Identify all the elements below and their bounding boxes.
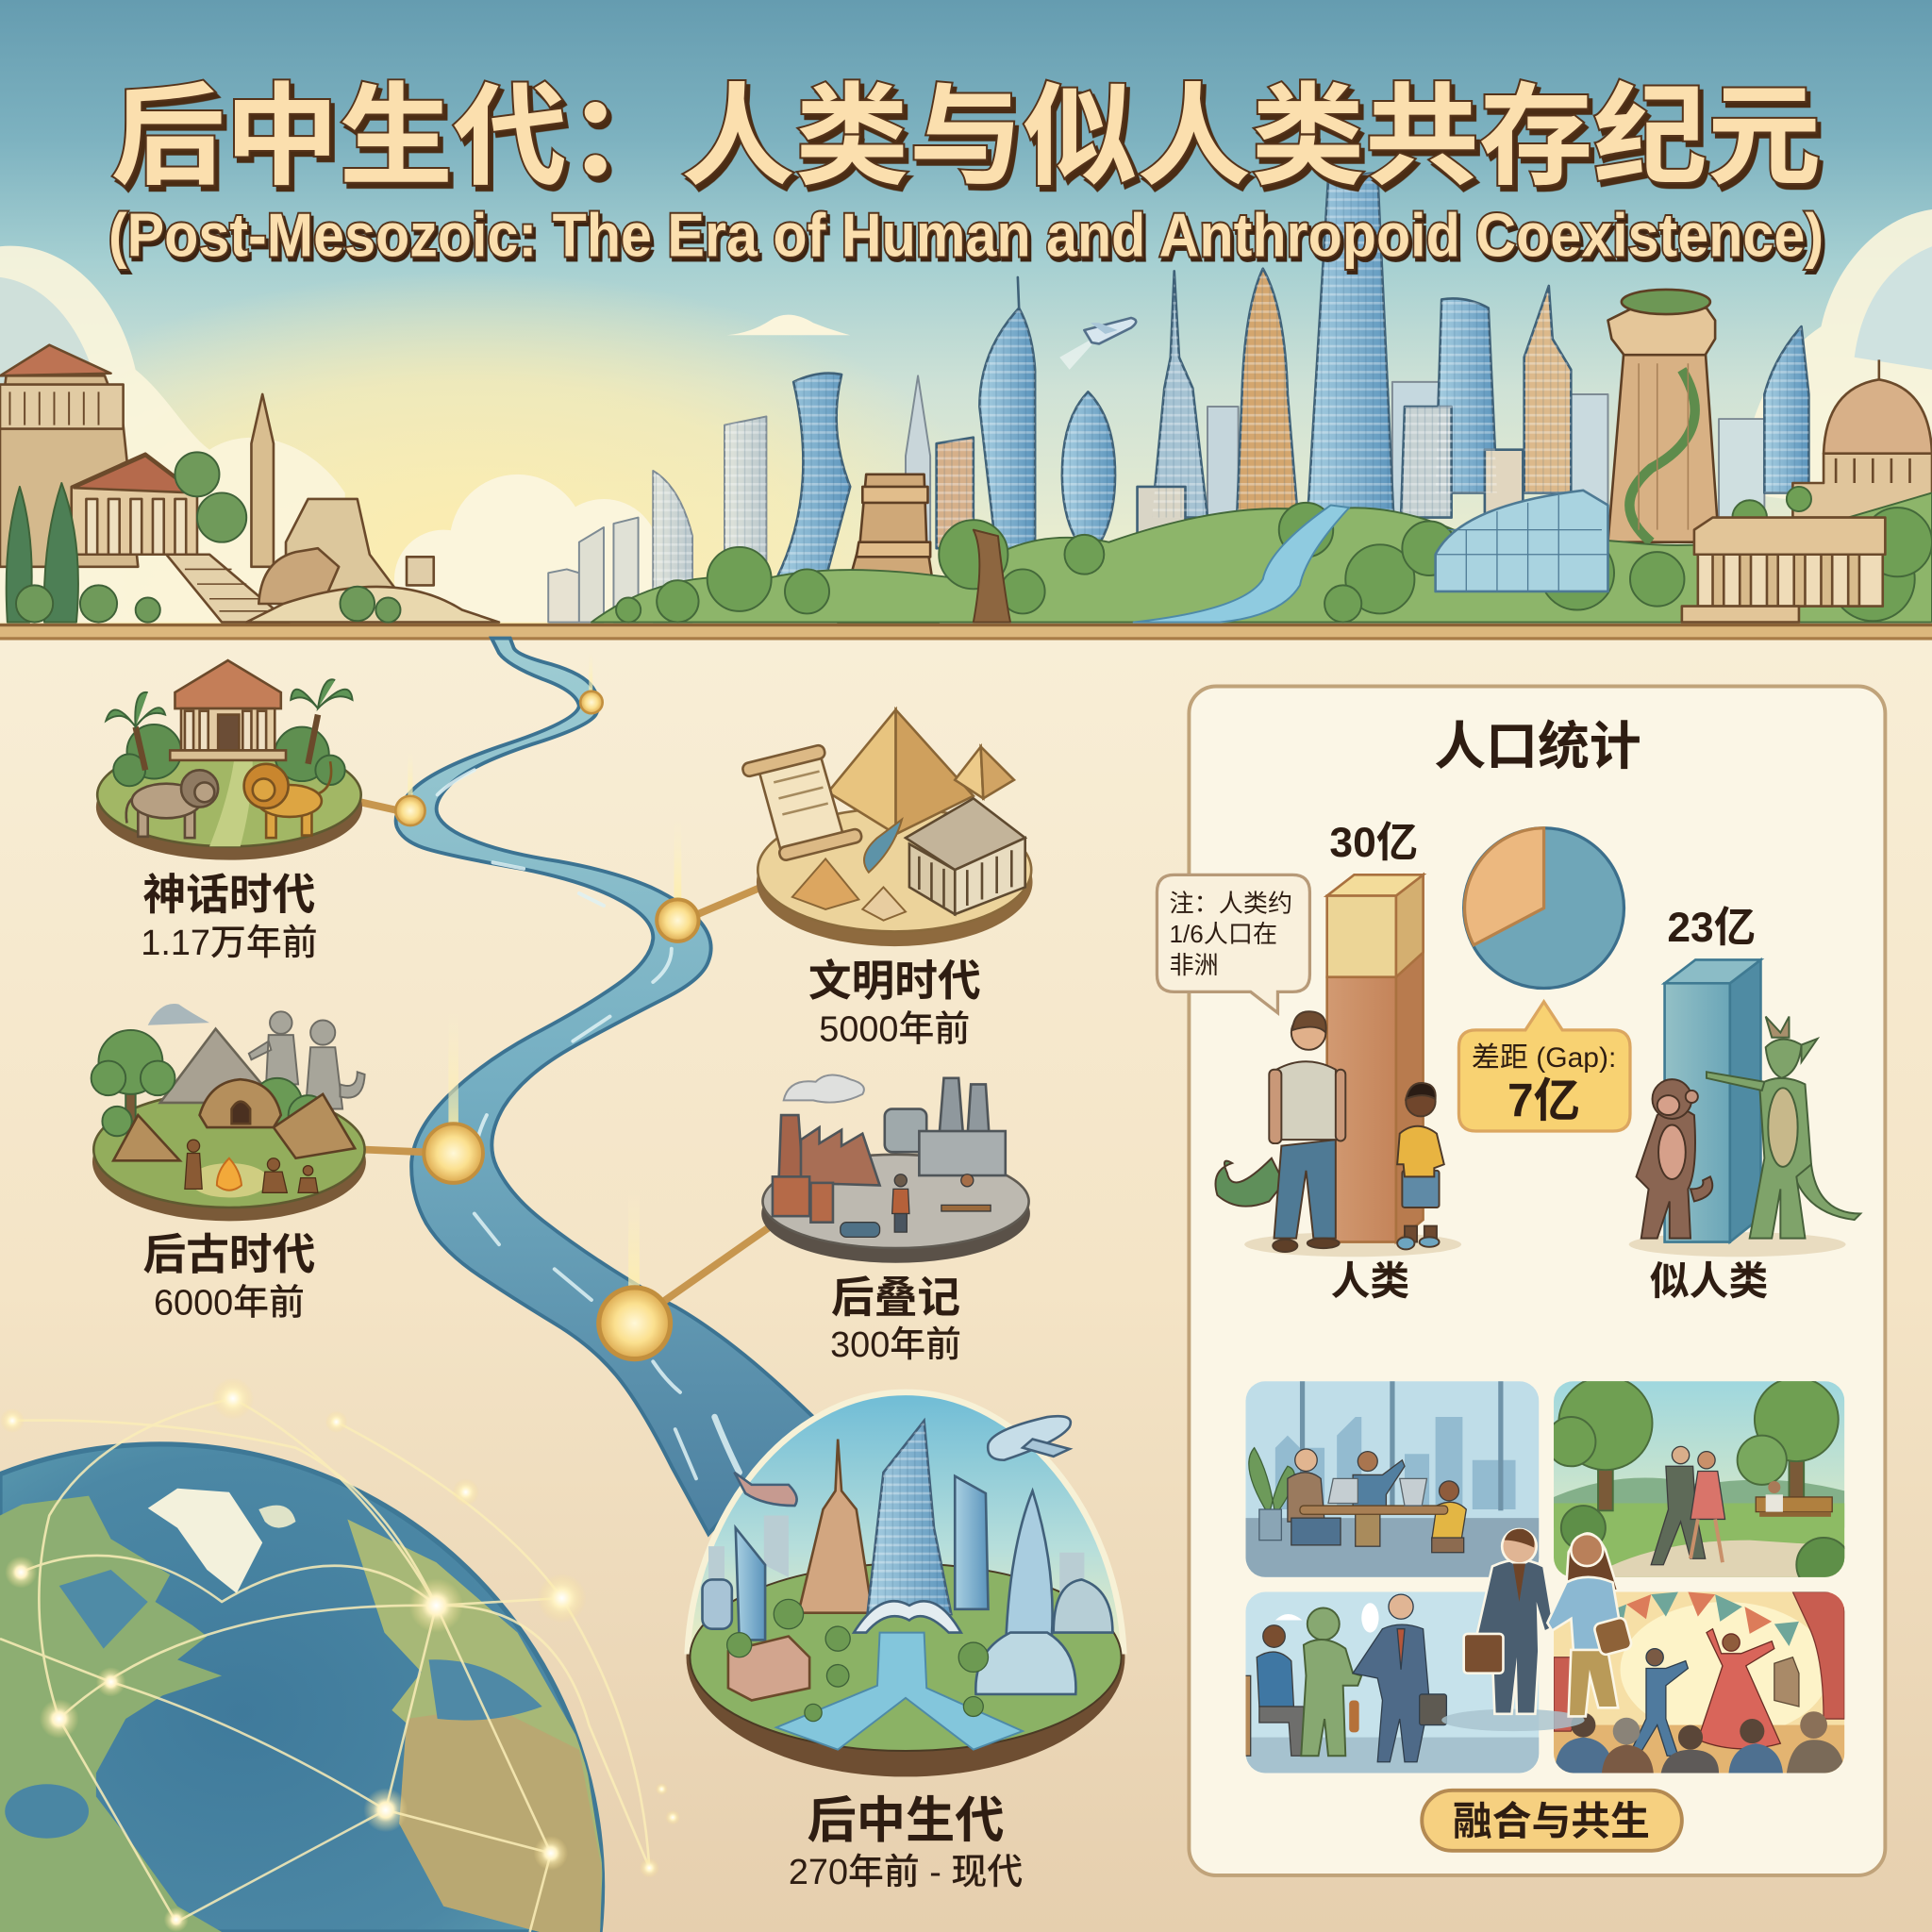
modern towers	[776, 173, 1808, 579]
era 4: industrial island	[761, 1075, 1030, 1263]
era 4 label: 300年前	[830, 1325, 961, 1365]
performer	[1629, 1649, 1688, 1756]
winding city river	[1134, 506, 1349, 623]
right temple	[1682, 518, 1885, 623]
gap callout: 7亿	[1507, 1074, 1580, 1126]
era 3 label: 后古时代	[143, 1230, 315, 1278]
side towers	[736, 1528, 765, 1640]
smoke	[784, 1075, 864, 1103]
category labels: 似人类	[1650, 1259, 1768, 1304]
walking couple	[1651, 1446, 1725, 1565]
volcano mountain	[160, 1029, 277, 1103]
worker, table and train	[841, 1174, 991, 1237]
era 5 label: 270年前 - 现代	[789, 1853, 1023, 1892]
scene: park walk	[1554, 1381, 1845, 1577]
timeline river	[396, 639, 813, 1534]
tan spire	[798, 1440, 873, 1613]
pie chart	[1464, 828, 1624, 989]
central tower	[868, 1421, 951, 1614]
ancient brown tower	[838, 475, 939, 623]
chimneys and factories	[773, 1078, 1006, 1223]
integration pill: 融合与共生	[1453, 1799, 1650, 1843]
era 5 label: 后中生代	[808, 1793, 1004, 1848]
note bubble	[1157, 874, 1309, 1013]
era 4 label: 后叠记	[831, 1274, 960, 1322]
era 2 label: 5000年前	[819, 1010, 970, 1050]
era 5: future dome island	[687, 1392, 1124, 1776]
era 5 label	[789, 1793, 1023, 1892]
clouds	[0, 209, 1932, 628]
plants	[1249, 1448, 1294, 1516]
gap callout	[1458, 1002, 1630, 1131]
era 1 label: 神话时代	[143, 871, 315, 919]
paper background	[0, 639, 1932, 1932]
bench	[1756, 1497, 1832, 1512]
main title: 后中生代：人类与似人类共存纪元	[111, 75, 1821, 198]
distant pale towers	[548, 375, 1764, 623]
timeline nodes	[395, 653, 699, 1359]
anthropoid bar chart column	[1665, 959, 1760, 1242]
skyline illustration	[0, 173, 1932, 813]
figure: man with tail	[1215, 1011, 1345, 1252]
figure: monkey	[1637, 1079, 1712, 1239]
dancer	[1698, 1629, 1780, 1749]
gap callout: 差距 (Gap):	[1472, 1042, 1616, 1074]
era 1 label	[141, 871, 318, 963]
domed capitol	[1792, 359, 1932, 518]
people at table	[1288, 1449, 1466, 1553]
woman with bag	[1549, 1535, 1631, 1715]
category labels	[1331, 1259, 1768, 1304]
scene: stage performance	[1554, 1592, 1844, 1774]
greek temple	[170, 660, 286, 760]
palm trees	[106, 679, 353, 786]
scene: office meeting	[1245, 1381, 1539, 1577]
era 1: myth age island	[96, 660, 362, 860]
figure: lizard humanoid	[1707, 1017, 1860, 1239]
anthropoid value: 23亿	[1667, 905, 1756, 951]
era 1 label: 1.17万年前	[141, 924, 318, 963]
ground shadows	[1244, 1232, 1846, 1257]
horizon band divider	[0, 624, 1932, 641]
temple	[906, 798, 1025, 914]
suited man	[1353, 1594, 1446, 1762]
era 4 label	[830, 1274, 961, 1365]
figure: boy	[1397, 1083, 1444, 1249]
era 2: civilization island	[741, 709, 1033, 946]
green ape figure	[1301, 1607, 1361, 1756]
audience heads	[1555, 1711, 1844, 1774]
tower window lines	[653, 173, 1808, 623]
continents	[0, 1489, 603, 1932]
network sparks	[0, 1377, 680, 1932]
connector lines to eras	[355, 801, 789, 1321]
mini pyramids and feather	[792, 820, 906, 921]
glass dome	[1436, 491, 1607, 591]
panel heading: 人口统计	[1434, 717, 1641, 775]
note bubble: 注：人类约	[1170, 890, 1292, 918]
human bar chart column	[1327, 874, 1424, 1242]
globe with network	[0, 1377, 680, 1932]
airplane	[1059, 318, 1136, 370]
panel: population statistics	[1157, 687, 1885, 1875]
central waterfall river	[776, 1633, 1023, 1750]
era 3 label	[143, 1230, 315, 1324]
era 2 label: 文明时代	[808, 957, 981, 1005]
era 2 label	[808, 957, 981, 1050]
campfire and people	[190, 1163, 269, 1198]
airplanes	[734, 1416, 1071, 1506]
warm horizon glow	[0, 271, 998, 813]
man with briefcase	[1465, 1530, 1553, 1713]
note bubble: 1/6人口在	[1170, 920, 1277, 948]
note bubble: 非洲	[1170, 951, 1219, 979]
era 3: stone age island	[92, 1004, 366, 1221]
network lines	[0, 1398, 649, 1932]
central couple	[1441, 1529, 1631, 1731]
era 3 label: 6000年前	[154, 1284, 305, 1324]
huts	[113, 1079, 355, 1160]
sky background	[0, 0, 1932, 628]
trees	[1554, 1381, 1845, 1577]
pyramids	[828, 709, 1014, 834]
category labels: 人类	[1331, 1259, 1409, 1304]
scene: handshake meeting	[1239, 1592, 1539, 1774]
cloud and shadow figures	[148, 1004, 209, 1025]
seated man	[1245, 1624, 1304, 1757]
bunting	[1602, 1592, 1799, 1646]
integration pill	[1422, 1790, 1682, 1851]
ancient left temple tower	[0, 345, 499, 623]
lion statues	[126, 770, 218, 838]
human value: 30亿	[1329, 820, 1418, 866]
vine tower	[1607, 290, 1719, 542]
left vegetation	[7, 452, 400, 623]
skyline haze	[708, 1516, 1084, 1602]
tree and bush	[92, 1030, 327, 1136]
scroll	[741, 744, 863, 861]
greenery band	[591, 487, 1932, 623]
